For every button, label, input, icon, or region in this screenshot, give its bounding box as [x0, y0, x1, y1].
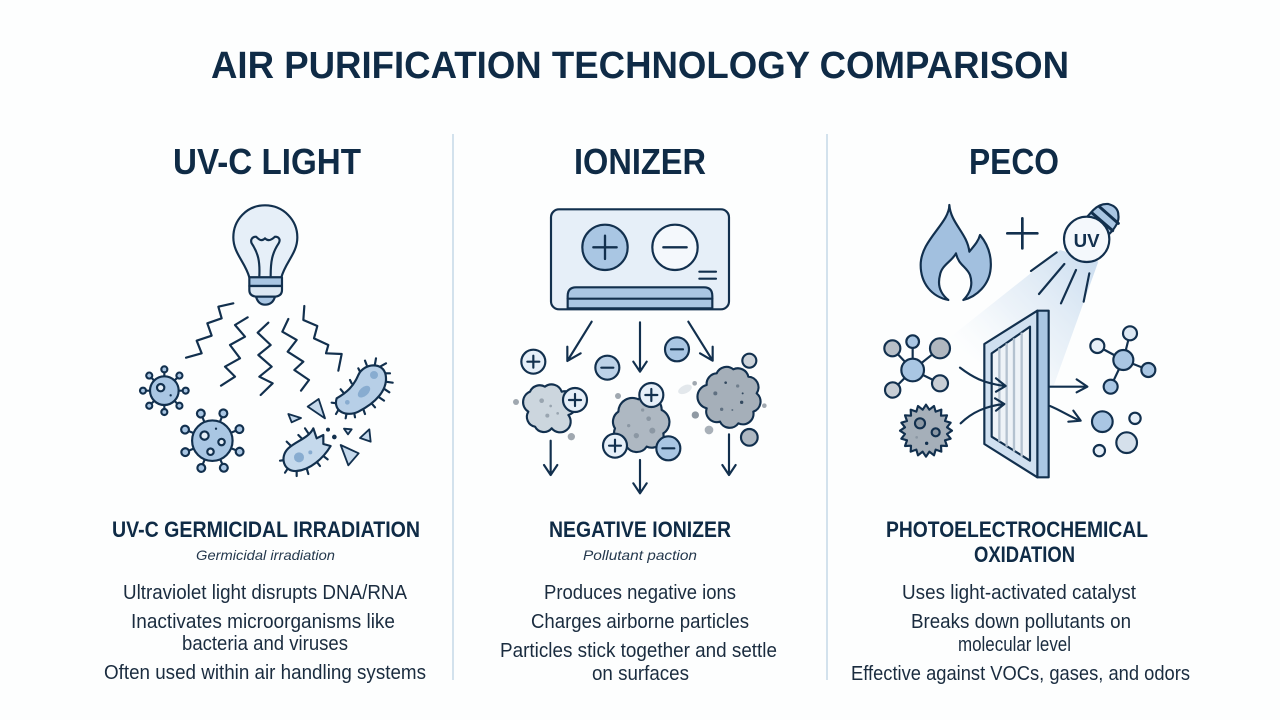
icon: spiky pollutant — [900, 405, 952, 457]
text block: ionizer bullet lines: Produces negative ions — [544, 582, 736, 604]
icon: light particle cluster — [513, 384, 587, 440]
text block: UV-C bullet lines: bacteria and viruses — [182, 633, 348, 655]
icon: flame — [921, 205, 991, 300]
icon: broken bacterium — [280, 428, 331, 476]
subheading: negative ionizer: NEGATIVE IONIZER — [549, 517, 731, 542]
icon: clean particles — [1092, 411, 1141, 456]
illustration: UV-C bulb and microbes — [140, 205, 393, 476]
text block: PECO bullet lines: Effective against VOCs, gases, and odors — [851, 663, 1190, 685]
icon: charged ions — [521, 337, 689, 380]
icon: UV bulb: UV — [1074, 230, 1100, 251]
icon: light bulb — [233, 205, 297, 305]
icon: round particle cluster — [677, 354, 767, 446]
caption: pollutant paction: Pollutant paction — [583, 547, 697, 563]
icon: molecule input — [884, 335, 950, 398]
text block: UV-C bullet lines: Inactivates microorganisms like — [131, 611, 395, 633]
icon: small virus — [140, 366, 189, 415]
text block: ionizer bullet lines: on surfaces — [592, 663, 689, 685]
icon: UV light beam — [947, 250, 1098, 387]
icon: UV wave lines — [186, 303, 342, 395]
text block: ionizer bullet lines: Particles stick together and settle — [500, 640, 777, 662]
subheading: photoelectrochemical oxidation — [886, 517, 1148, 567]
illustration: ionizer and particles — [513, 209, 767, 493]
subheading: UV-C germicidal irradiation: UV-C GERMICIDAL IRRADIATION — [112, 517, 420, 542]
icon: filter panel — [984, 311, 1049, 477]
subheading: photoelectrochemical oxidation: OXIDATION — [974, 542, 1075, 567]
text block: UV-C bullet lines — [104, 582, 426, 684]
icon: input arrows — [960, 368, 1006, 423]
text block: ionizer bullet lines: Charges airborne particles — [531, 611, 749, 633]
icon: settling arrows — [544, 434, 736, 493]
text block: PECO bullet lines — [851, 582, 1190, 685]
icon: ionizer unit — [551, 209, 729, 309]
icon: large virus — [180, 408, 245, 473]
icon: downward arrows from unit — [567, 322, 713, 372]
panel: PECO — [851, 141, 1190, 685]
icon: output arrows — [1050, 379, 1087, 422]
icon: bacterium — [332, 358, 393, 418]
panel: ionizer — [500, 141, 777, 685]
text block: PECO bullet lines: molecular level — [958, 634, 1071, 656]
icon: UV bulb — [1064, 204, 1119, 262]
icon: light rays — [1031, 252, 1089, 303]
heading: ionizer: IONIZER — [574, 141, 706, 182]
heading: UV-C light: UV-C LIGHT — [173, 141, 361, 182]
subheading: photoelectrochemical oxidation: PHOTOELECTROCHEMICAL — [886, 517, 1148, 542]
caption: germicidal irradiation: Germicidal irradiation — [196, 547, 335, 563]
text block: ionizer bullet lines — [500, 582, 777, 685]
illustration: PECO catalyst — [884, 204, 1155, 477]
icon: plus — [1007, 218, 1037, 248]
text block: UV-C bullet lines: Often used within air handling systems — [104, 662, 426, 684]
heading: PECO: PECO — [969, 141, 1059, 182]
title: AIR PURIFICATION TECHNOLOGY COMPARISON — [211, 45, 1069, 87]
text block: PECO bullet lines: Uses light-activated catalyst — [902, 582, 1136, 604]
text block: PECO bullet lines: Breaks down pollutants on — [911, 611, 1131, 633]
icon: bacterial fragments — [288, 399, 371, 465]
text block: UV-C bullet lines: Ultraviolet light disrupts DNA/RNA — [123, 582, 408, 604]
icon: molecule output — [1090, 326, 1155, 394]
icon: dark particle cluster — [603, 383, 680, 460]
panel: UV-C light — [104, 141, 426, 684]
